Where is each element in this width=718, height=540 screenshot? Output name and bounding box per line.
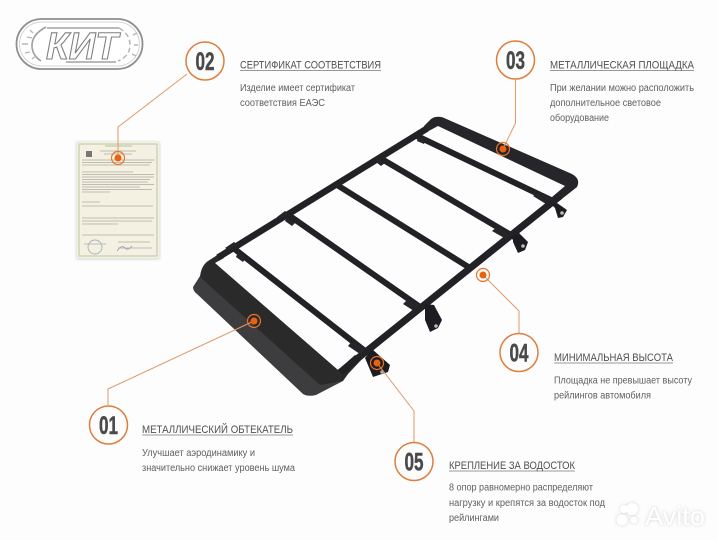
crossbar brackets bbox=[225, 137, 552, 354]
callout 03: оборудование bbox=[550, 112, 609, 124]
callout 05: 8 опор равномерно распределяют bbox=[449, 482, 593, 494]
callout 01: МЕТАЛЛИЧЕСКИЙ ОБТЕКАТЕЛЬ bbox=[142, 423, 293, 436]
callout 04: МИНИМАЛЬНАЯ ВЫСОТА bbox=[554, 352, 674, 364]
callout 02: Изделие имеет сертификат bbox=[240, 82, 355, 94]
logo: KIT: КИТ bbox=[46, 26, 121, 68]
callout 04 bbox=[476, 268, 692, 402]
callout 03: При желании можно расположить bbox=[550, 83, 694, 94]
callout 04: Площадка не превышает высоту bbox=[554, 376, 692, 386]
callout 02: 02 bbox=[196, 48, 214, 76]
callout 05: нагрузку и крепятся за водосток под bbox=[449, 498, 605, 509]
callout 01 bbox=[90, 314, 295, 474]
callout 05: КРЕПЛЕНИЕ ЗА ВОДОСТОК bbox=[449, 460, 576, 472]
callout 05: 05 bbox=[404, 448, 424, 476]
crossbars bbox=[232, 136, 553, 351]
callout 02 bbox=[112, 42, 381, 164]
fairing lower face bbox=[193, 276, 343, 396]
callout 01: Улучшает аэродинамику и bbox=[142, 448, 255, 459]
right rail bbox=[340, 196, 560, 372]
certificate document bbox=[76, 142, 160, 258]
callout 01: 01 bbox=[99, 412, 118, 440]
callout 04: рейлингов автомобиля bbox=[554, 390, 651, 402]
callout 05: рейлингами bbox=[449, 513, 499, 524]
roof rack bbox=[193, 117, 578, 396]
callout 03: дополнительное световое bbox=[550, 98, 661, 109]
callout 03: МЕТАЛЛИЧЕСКАЯ ПЛОЩАДКА bbox=[550, 60, 695, 72]
callout 05 bbox=[370, 356, 605, 524]
fairing upper face bbox=[200, 254, 363, 385]
mounting feet bbox=[365, 203, 567, 377]
callout 03 bbox=[496, 41, 695, 156]
side rails bbox=[218, 128, 427, 258]
rear plate bbox=[424, 117, 578, 202]
callout 02: соответствия ЕАЭС bbox=[240, 98, 325, 109]
callout 01: значительно снижает уровень шума bbox=[142, 463, 295, 474]
callout 04: 04 bbox=[510, 340, 529, 368]
callout 03: 03 bbox=[506, 47, 525, 75]
callout 02: СЕРТИФИКАТ СООТВЕТСТВИЯ bbox=[240, 60, 381, 72]
watermark: Avito bbox=[616, 501, 705, 531]
watermark: Avito: Avito bbox=[645, 501, 705, 531]
logo: KIT bbox=[16, 19, 142, 69]
